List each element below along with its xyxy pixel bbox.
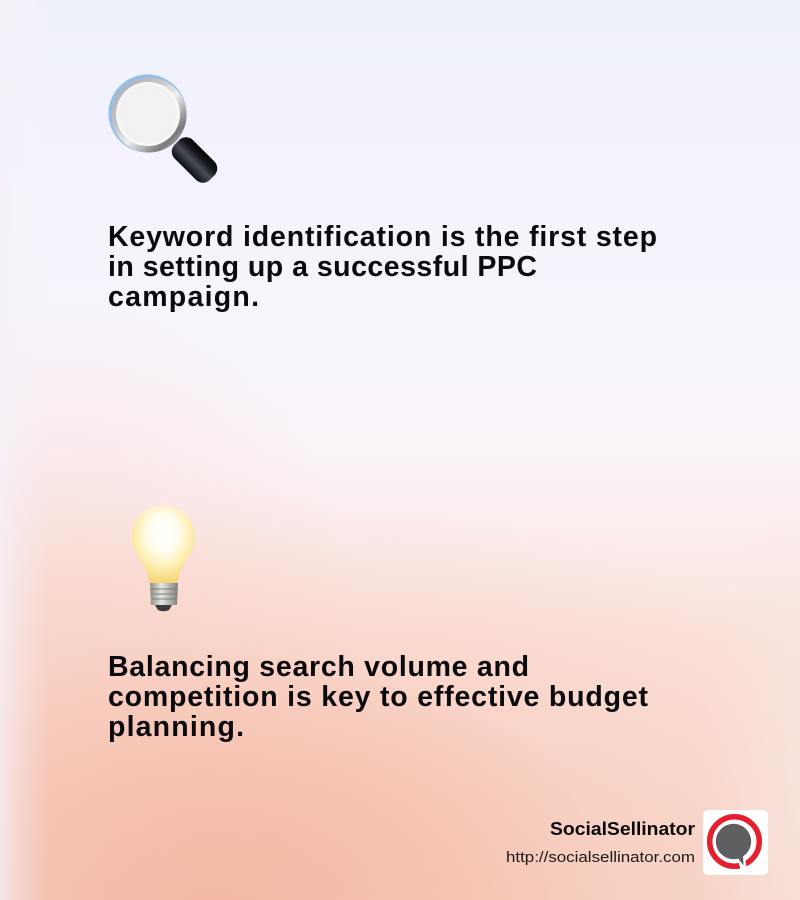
icon: magnifying glass xyxy=(108,74,221,187)
text block: balancing search volume: competition is key to effective budget xyxy=(108,681,648,713)
brand url: http://socialsellinator.com xyxy=(506,849,695,866)
icon: light bulb xyxy=(132,506,194,611)
logo xyxy=(703,810,768,875)
text block: balancing search volume: Balancing search volume and xyxy=(108,651,529,683)
text block: keyword identification: Keyword identification is the first step xyxy=(108,221,657,253)
text block: keyword identification: campaign. xyxy=(108,281,259,313)
text block: balancing search volume: planning. xyxy=(108,711,244,743)
text block: keyword identification: in setting up a successful PPC xyxy=(108,251,537,283)
brand name: SocialSellinator xyxy=(550,819,695,839)
